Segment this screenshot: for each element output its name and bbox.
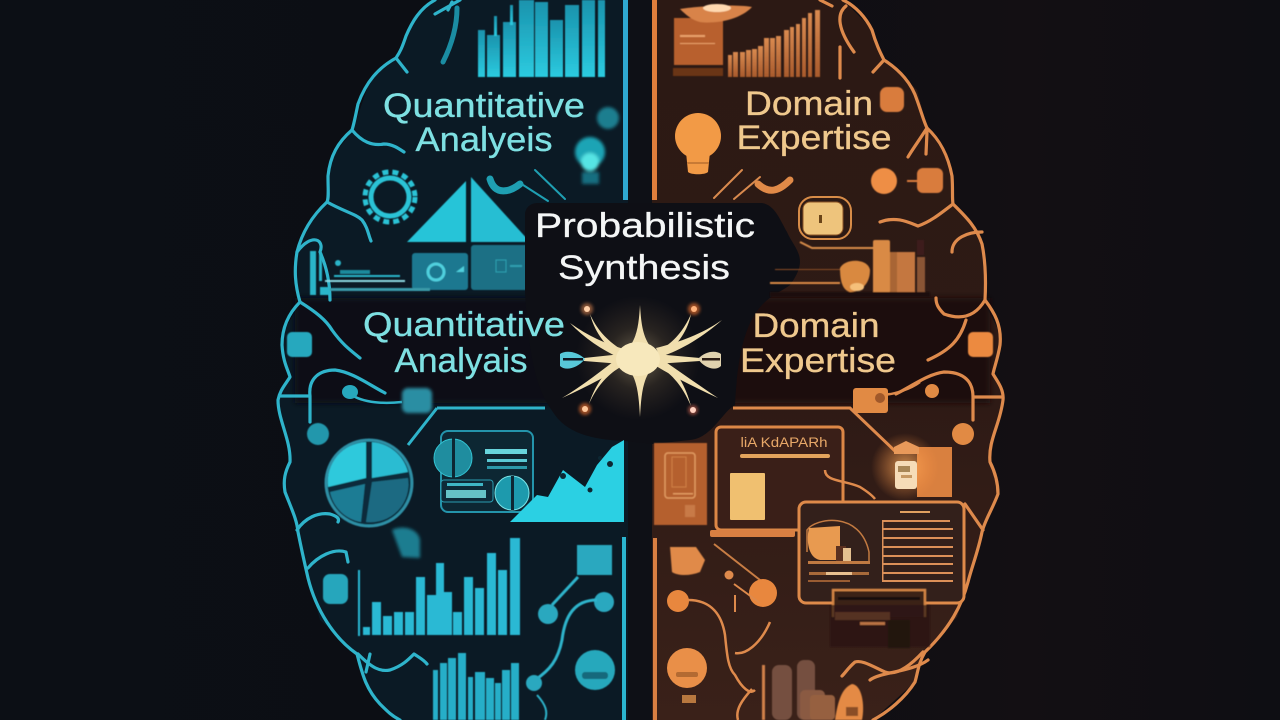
icon: node dot [342,385,358,399]
heading: domain expertise lower: Expertise [740,342,896,380]
icon: glowing laptop top right [673,4,752,76]
icon: robot face circle [575,650,615,690]
right brain outline [820,0,1003,720]
centre vertical bar, left lower [622,537,626,720]
bar chart: mid left [358,538,520,636]
laptop panel: liA KdAPARh [740,434,828,450]
icon: right rounded square [968,332,993,357]
monitor stand [830,590,930,648]
heading: quantitative analysis lower: Analyais [394,342,528,380]
dashboard card [434,431,533,512]
centre divide [628,0,652,720]
heading: domain expertise top [736,85,892,157]
icon: lantern [871,433,952,501]
icon: squiggle and lines [490,170,565,201]
icon: shelf of books and mug [770,240,930,297]
heading: domain expertise top: Domain [745,85,873,123]
left hemisphere interior [278,0,628,720]
icon: squiggle and lines right [714,170,790,199]
icon: rounded square lower left [323,574,348,604]
right hemisphere interior [652,0,1003,720]
area chart [510,440,624,522]
heading: probabilistic synthesis: Synthesis [558,249,730,287]
heading: quantitative analysis top [383,87,585,159]
heading: domain expertise lower [740,307,896,380]
left brain outline [278,0,460,720]
neural starburst [560,296,722,420]
left node connectors, middle [347,391,545,445]
area chart peaks [560,456,613,492]
icon: teal lightbulb and dot [575,107,619,184]
heading: quantitative analysis lower: Quantitative [363,306,565,344]
icon: rounded square left [287,332,312,357]
icon: rounded square node [402,388,432,413]
city skyline [762,660,863,720]
icon: gear [365,172,415,222]
icon: split house [407,177,533,290]
centre vertical bar, right lower [653,538,657,720]
laptop panel [710,427,875,537]
panel: book side panel [654,443,707,525]
icon: node cluster upper lower-right [733,382,974,453]
icon: right rounded squares [871,87,943,194]
heading: probabilistic synthesis [535,207,755,287]
dark band behind lower domain label [700,298,990,403]
bar chart: top right [728,10,820,77]
dark centre blob [525,203,800,444]
heading: domain expertise top: Expertise [736,119,892,157]
icon: square node with connector [526,545,614,720]
heading: domain expertise lower: Domain [752,307,880,345]
heading: probabilistic synthesis: Probabilistic [535,207,755,245]
icon: callout bubble under pie [392,528,420,558]
monitor panel [799,502,964,603]
heading: quantitative analysis lower [363,306,565,380]
icon: tablet [799,197,851,239]
bar chart: bottom left [433,653,519,720]
icon: circuit detail [310,251,430,295]
icon: mug [670,547,705,575]
icon: connector nodes lower right [667,544,777,720]
icon: orange lightbulb [675,113,721,174]
dark band behind lower quantitative label [295,298,625,403]
bar chart: top left [478,0,605,77]
pie chart [326,440,412,526]
centre vertical bar, right [652,0,657,200]
centre vertical bars, left [623,0,628,200]
heading: quantitative analysis top: Analyeis [416,121,552,159]
heading: quantitative analysis top: Quantitative [383,87,585,125]
icon: node dot left [307,423,329,445]
icon: curved stroke top left [443,8,457,62]
